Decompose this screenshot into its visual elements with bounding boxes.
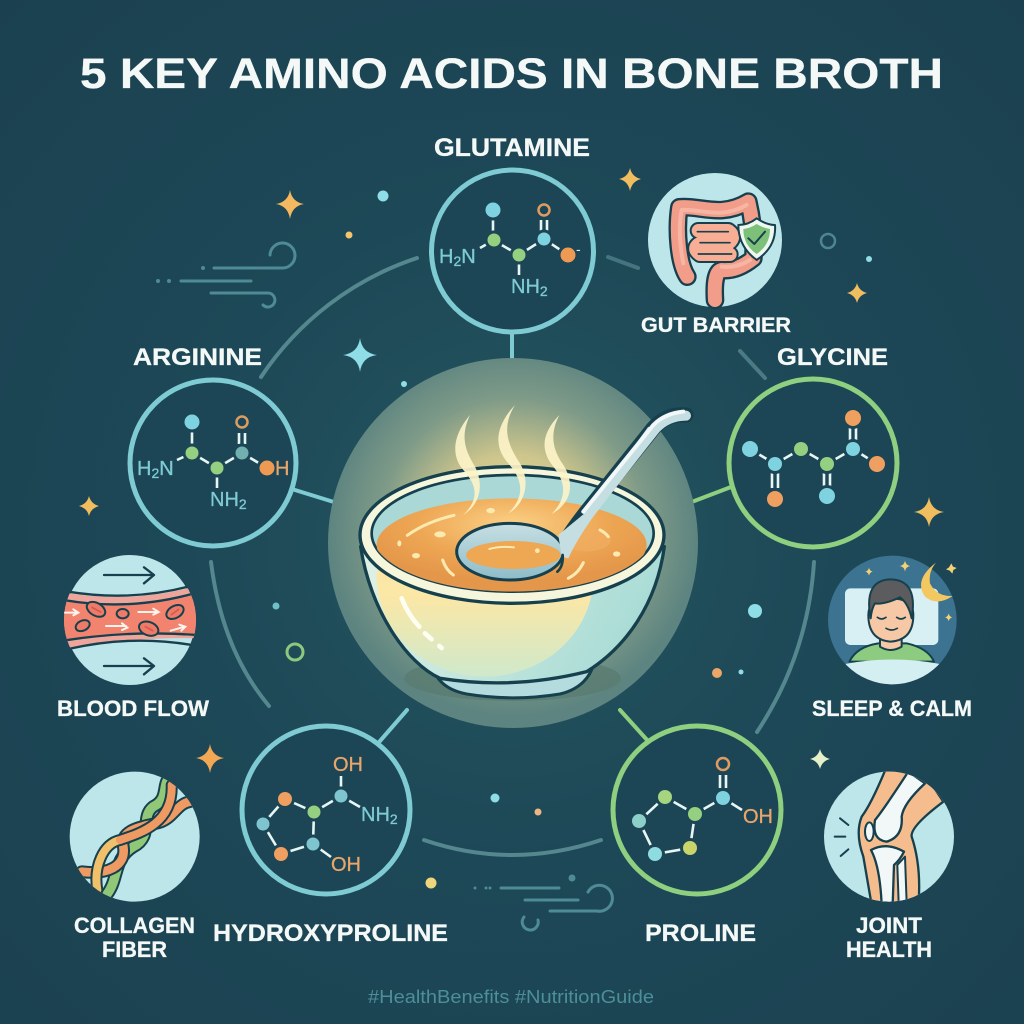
hydroxyproline molecule: 2 [390, 811, 398, 827]
hydroxyproline molecule: NH [361, 804, 390, 826]
glutamine molecule: 2 [540, 283, 548, 299]
glycine ring [729, 379, 897, 547]
glutamine ring [432, 170, 594, 332]
hydroxyproline ring [242, 726, 410, 894]
hydroxyproline label: HYDROXYPROLINE [213, 920, 448, 947]
small intestine [696, 231, 732, 254]
central glow [328, 358, 698, 728]
benefit: blood flow [57, 555, 209, 721]
panel: glycine [729, 344, 897, 547]
bowl outline [361, 547, 664, 683]
proline molecule: OH [743, 806, 773, 828]
benefit: sleep and calm [812, 556, 972, 721]
gut barrier label: GUT BARRIER [641, 314, 791, 337]
panel: arginine [130, 344, 296, 546]
benefit: joint health: HEALTH [846, 937, 932, 962]
proline label: PROLINE [645, 920, 756, 947]
bowl interior [372, 475, 654, 592]
blood vessel icon [60, 555, 200, 685]
blood flow label: BLOOD FLOW [57, 696, 209, 721]
hydroxyproline molecule [256, 754, 398, 876]
colon [678, 202, 754, 300]
proline molecule [632, 758, 773, 861]
arginine molecule: H [275, 458, 289, 480]
panel: glutamine [432, 134, 594, 332]
benefit: collagen fiber: FIBER [102, 937, 167, 962]
arginine label: ARGININE [133, 344, 262, 371]
glutamine molecule: H [439, 246, 453, 268]
glutamine molecule: 2 [453, 253, 461, 269]
shield with check [738, 218, 775, 260]
broth surface [377, 498, 647, 592]
arginine molecule: N [159, 458, 174, 480]
panel: hydroxyproline [213, 726, 448, 947]
glycine label: GLYCINE [777, 344, 888, 371]
proline ring [613, 726, 781, 894]
bowl foot [432, 658, 595, 698]
broth bowl with ladle and steam [360, 405, 686, 701]
panel: proline [613, 726, 781, 947]
glutamine molecule: NH [511, 276, 540, 298]
wind swirl upper left [156, 243, 295, 307]
wind swirl bottom centre [474, 874, 612, 930]
collagen strands icon [70, 772, 200, 902]
steam wisps [455, 405, 570, 515]
sleeping person icon [828, 556, 957, 687]
ladle [457, 412, 686, 580]
glutamine label: GLUTAMINE [434, 134, 590, 162]
arginine molecule: 2 [151, 465, 159, 481]
hashtag footer: #HealthBenefits #NutritionGuide [368, 987, 654, 1007]
broth highlights [397, 508, 620, 578]
sleep and calm label: SLEEP & CALM [812, 696, 972, 721]
bowl yellow sheen [376, 568, 592, 676]
benefit: joint health [824, 767, 954, 962]
knee icon [824, 767, 954, 905]
arginine molecule [137, 414, 289, 512]
arginine molecule: NH [210, 489, 239, 511]
title: 5 KEY AMINO ACIDS IN BONE BROTH [80, 50, 943, 98]
arginine molecule: 2 [239, 496, 247, 512]
glycine molecule [742, 410, 885, 507]
glutamine molecule: N [461, 246, 476, 268]
bowl rim [360, 467, 664, 603]
benefit: gut barrier [641, 173, 791, 337]
glutamine molecule [439, 202, 581, 299]
collagen fiber label: COLLAGEN [74, 913, 195, 938]
arginine ring [130, 380, 296, 546]
bowl body [361, 547, 664, 683]
benefit: collagen fiber [70, 772, 200, 962]
hydroxyproline molecule: OH [333, 754, 363, 776]
ring arcs connecting the panels [211, 257, 814, 855]
glutamine molecule: - [576, 241, 581, 257]
connector lines to the bowl [295, 333, 731, 741]
sparkles and dots [79, 168, 944, 888]
bowl highlights [402, 598, 442, 648]
hydroxyproline molecule: OH [331, 854, 361, 876]
gut icon [648, 173, 782, 307]
joint health label: JOINT [856, 913, 923, 938]
bowl shadow [404, 656, 621, 701]
arginine molecule: H [137, 458, 151, 480]
